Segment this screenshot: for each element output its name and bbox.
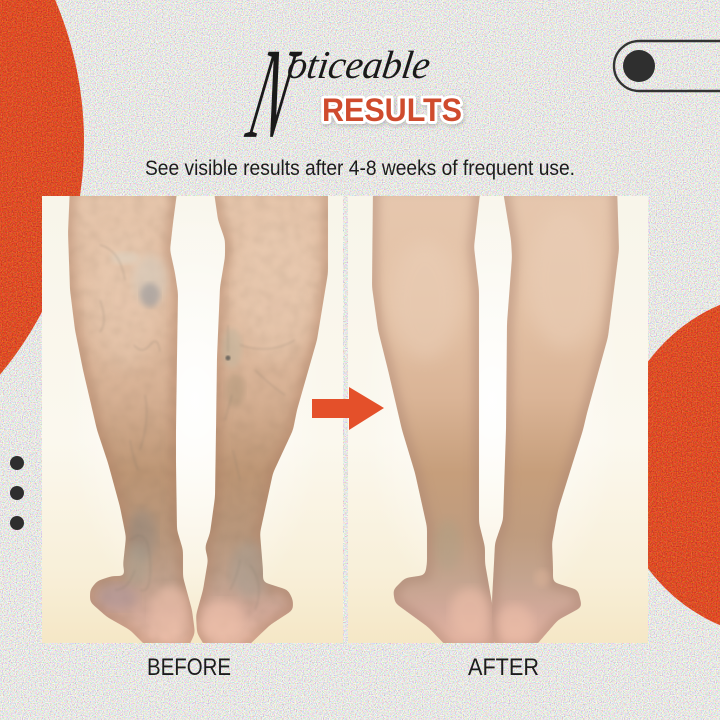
right leg before (196, 196, 328, 643)
arrow (312, 387, 384, 430)
decorative circle: right (614, 291, 720, 639)
left leg before (68, 196, 194, 643)
panel: before photo (42, 170, 343, 650)
subheading: See visible results after 4-8 weeks of frequent use. (145, 157, 575, 180)
label: before: BEFORE (147, 654, 231, 681)
left leg after (372, 196, 494, 643)
heading: results: RESULTS (322, 92, 462, 128)
label: after: AFTER (468, 654, 539, 681)
three dots (10, 456, 24, 530)
heading: noticeable script: oticeable (285, 43, 433, 87)
text: N (238, 21, 306, 166)
toggle icon (614, 41, 720, 91)
panel: after photo (348, 170, 648, 650)
heading: noticeable script (238, 21, 433, 166)
decorative circle: top left (0, 0, 84, 506)
right leg after (492, 196, 619, 643)
